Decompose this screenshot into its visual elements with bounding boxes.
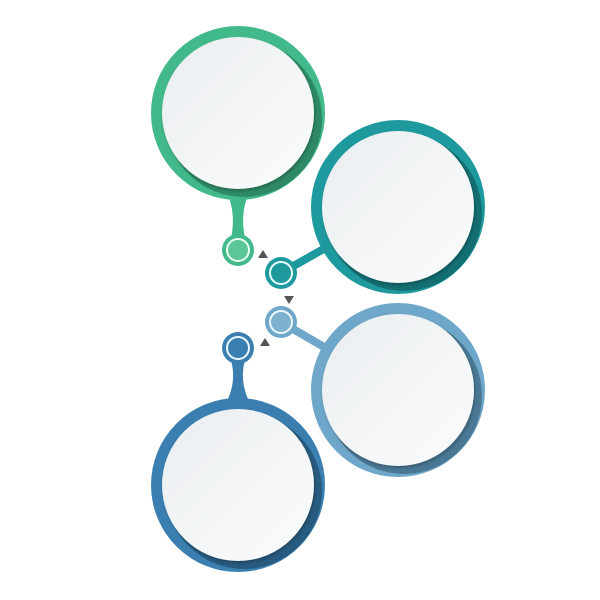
arrow: up 2 (260, 338, 270, 346)
node: green (222, 234, 254, 266)
node: light blue (265, 306, 297, 338)
node: teal (265, 257, 297, 289)
panel: light blue circle (265, 303, 485, 477)
node: blue (222, 332, 254, 364)
panel: green circle (151, 26, 325, 266)
panel: blue circle (151, 332, 325, 572)
arrow: up 1 (258, 250, 268, 258)
arrow: down (284, 296, 294, 304)
panel: teal circle (265, 120, 485, 294)
